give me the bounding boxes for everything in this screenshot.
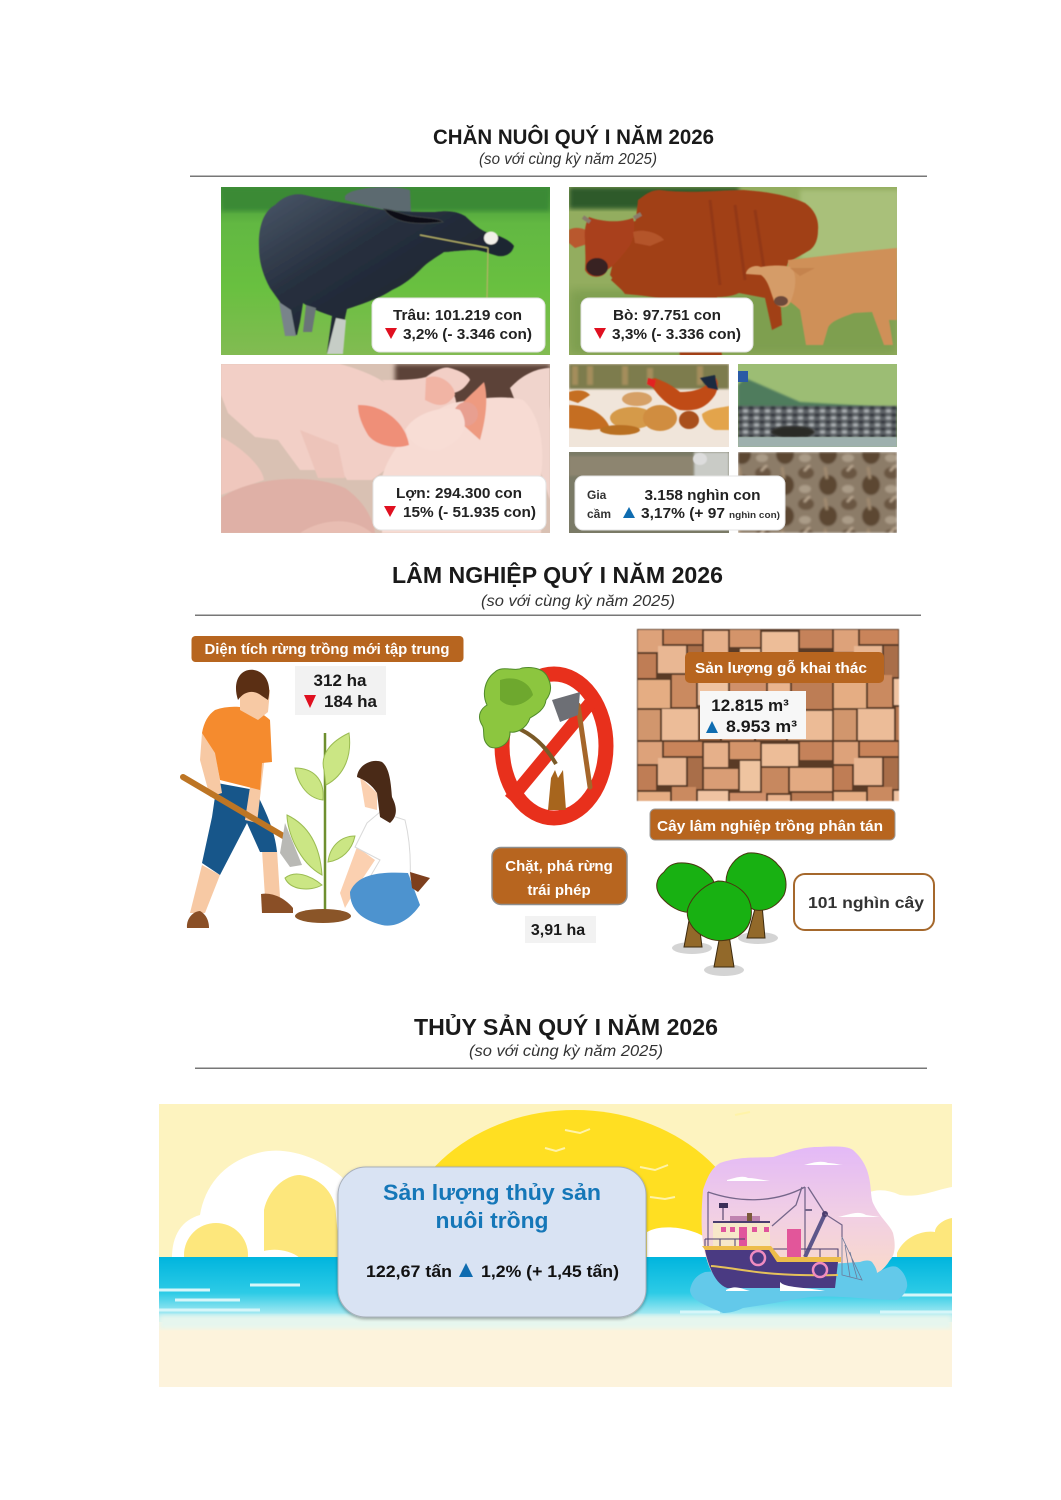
value box: 101 nghìn cây: [794, 874, 934, 930]
callout: trâu: Trâu: 101.219 con: [393, 307, 522, 324]
panel: chăn nuôi: [190, 125, 927, 533]
photo: lợn: [221, 364, 550, 533]
callout: lợn: 15% (- 51.935 con): [403, 504, 536, 521]
value box: rừng trồng: 184 ha: [324, 692, 377, 711]
value box: sản lượng gỗ: 8.953 m³: [726, 717, 797, 736]
info card: sản lượng thủy sản: nuôi trồng: [436, 1208, 548, 1233]
photo: vịt trên hồ: [738, 364, 897, 447]
info card: sản lượng thủy sản: [338, 1167, 646, 1317]
banner: sản lượng gỗ: Sản lượng gỗ khai thác: [695, 660, 867, 677]
banner: cây lâm nghiệp phân tán: Cây lâm nghiệp trồng phân tán: [657, 818, 883, 835]
callout: gia cầm: 3.158 nghìn con: [644, 487, 760, 504]
panel: thủy sản: [159, 1012, 952, 1414]
birds: [545, 1112, 750, 1199]
sapling: [285, 733, 355, 923]
illustration: người trồng cây: [183, 670, 430, 928]
callout: gia cầm: 3,17% (+ 97: [641, 505, 725, 522]
callout: lợn: Lợn: 294.300 con: [396, 485, 522, 502]
value box: chặt phá rừng: 3,91 ha: [531, 922, 585, 939]
banner: diện tích rừng trồng: [192, 636, 464, 662]
value box: sản lượng gỗ: [700, 691, 806, 739]
value box: rừng trồng: [295, 666, 386, 715]
callout: trâu: 3,2% (- 3.346 con): [403, 326, 532, 343]
callout: bò: [581, 298, 753, 352]
callout: bò: Bò: 97.751 con: [613, 307, 721, 324]
callout: lợn: [373, 476, 546, 530]
callout: gia cầm: [575, 476, 785, 530]
value box: sản lượng gỗ: 12.815 m³: [711, 696, 789, 715]
heading: chăn nuôi: CHĂN NUÔI QUÝ I NĂM 2026: [433, 125, 714, 149]
sun: [395, 1110, 755, 1414]
heading: thủy sản: (so với cùng kỳ năm 2025): [469, 1043, 663, 1060]
clouds on blob: [727, 1162, 880, 1217]
label: chặt phá rừng: Chặt, phá rừng: [505, 858, 613, 875]
heading: lâm nghiệp: [195, 561, 921, 616]
photo: trâu: [221, 187, 550, 355]
callout: trâu: [372, 298, 545, 352]
icon: cụm cây: [657, 853, 786, 976]
photo: đàn vịt: [738, 452, 897, 533]
banner: diện tích rừng trồng: Diện tích rừng trồng mới tập trung: [204, 641, 450, 658]
heading: chăn nuôi: (so với cùng kỳ năm 2025): [479, 151, 657, 168]
callout: gia cầm: cầm: [587, 507, 611, 521]
illustration: biển: [159, 1104, 952, 1414]
photo: gỗ xếp chồng: [637, 629, 899, 801]
banner: sản lượng gỗ: [685, 652, 884, 683]
value box: chặt phá rừng: [525, 916, 596, 943]
clouds left: [172, 1151, 352, 1287]
label: chặt phá rừng: trái phép: [527, 882, 591, 899]
boat: [702, 1187, 862, 1291]
panel: lâm nghiệp: [183, 561, 934, 976]
woman kneeling: [340, 761, 430, 926]
clouds right: [647, 1187, 952, 1258]
splash: [690, 1260, 907, 1313]
icon: cấm chặt phá rừng: [479, 667, 606, 818]
photo: đàn gà sân: [569, 452, 729, 533]
heading: chăn nuôi: [190, 125, 927, 177]
heading: lâm nghiệp: LÂM NGHIỆP QUÝ I NĂM 2026: [392, 561, 723, 588]
photo: gà: [569, 364, 729, 447]
callout: gia cầm: nghìn con): [729, 510, 780, 521]
photo: bò: [569, 187, 900, 356]
callout: bò: 3,3% (- 3.336 con): [612, 326, 741, 343]
heading: thủy sản: THỦY SẢN QUÝ I NĂM 2026: [414, 1012, 718, 1040]
heading: lâm nghiệp: (so với cùng kỳ năm 2025): [481, 593, 675, 610]
info card: sản lượng thủy sản: 122,67 tấn: [366, 1262, 452, 1281]
value box: 101 nghìn cây: 101 nghìn cây: [808, 895, 924, 912]
label: chặt phá rừng: [492, 848, 627, 904]
info card: sản lượng thủy sản: 1,2% (+ 1,45 tấn): [481, 1262, 619, 1281]
value box: rừng trồng: 312 ha: [314, 671, 367, 690]
boat blob: [702, 1146, 895, 1285]
banner: cây lâm nghiệp phân tán: [650, 809, 895, 840]
heading: thủy sản: [195, 1012, 927, 1069]
callout: gia cầm: Gia: [587, 488, 607, 502]
info card: sản lượng thủy sản: Sản lượng thủy sản: [383, 1180, 601, 1205]
man digging: [183, 670, 302, 928]
